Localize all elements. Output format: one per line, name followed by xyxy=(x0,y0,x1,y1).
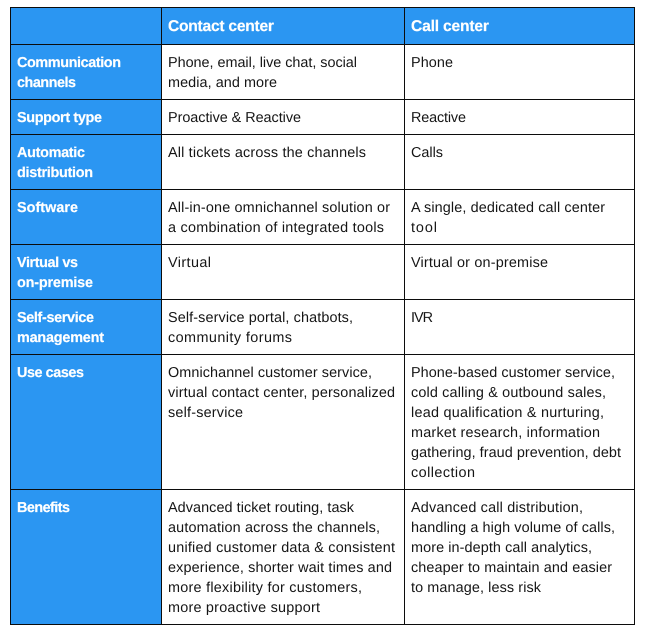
row: automatic distribution: distribution xyxy=(17,165,93,181)
row: software: tool xyxy=(411,220,437,236)
row: use cases: Phone-based customer service, xyxy=(411,365,615,381)
row: use cases: cold calling & outbound sales, xyxy=(411,385,606,401)
row: benefits: Advanced call distribution, xyxy=(411,500,583,516)
row: benefits: handling a high volume of calls, xyxy=(411,520,615,536)
row: automatic distribution: All tickets across the channels xyxy=(168,145,366,161)
row: use cases: Use cases xyxy=(17,365,84,381)
row: benefits: more proactive support xyxy=(168,600,320,616)
row: use cases: market research, information xyxy=(411,425,600,441)
row: benefits: to manage, less risk xyxy=(411,580,542,596)
row: benefits: Advanced ticket routing, task xyxy=(168,500,355,516)
row: use cases: self-service xyxy=(168,405,243,421)
row: support type: Reactive xyxy=(411,110,466,126)
row: use cases: lead qualification & nurturing, xyxy=(411,405,604,421)
row: communication channels: Phone, email, live chat, social xyxy=(168,55,357,71)
row: virtual vs on-premise: Virtual vs xyxy=(17,255,78,271)
row: use cases: Omnichannel customer service, xyxy=(168,365,372,381)
row: virtual vs on-premise: on-premise xyxy=(17,275,93,291)
row: software: a combination of integrated tools xyxy=(168,220,384,236)
row: support type xyxy=(17,110,466,126)
row: virtual vs on-premise: Virtual xyxy=(168,255,211,271)
row: automatic distribution xyxy=(17,145,443,181)
row: benefits: automation across the channels, xyxy=(168,520,380,536)
row: self-service management: Self-service xyxy=(17,310,94,326)
row: benefits: more flexibility for customers, xyxy=(168,580,362,596)
row: communication channels xyxy=(17,55,453,91)
row: self-service management: Self-service portal, chatbots, xyxy=(168,310,353,326)
row: self-service management xyxy=(17,310,433,346)
header row: Call center xyxy=(411,18,489,35)
row: communication channels: Communication xyxy=(17,55,121,71)
row: automatic distribution: Calls xyxy=(411,145,443,161)
row: self-service management: community forums xyxy=(168,330,292,346)
row: benefits: Benefits xyxy=(17,500,70,516)
row: self-service management: management xyxy=(17,330,104,346)
header row: Contact center xyxy=(168,18,274,35)
row: benefits xyxy=(17,500,615,616)
row: use cases xyxy=(17,365,621,481)
header row xyxy=(168,18,489,35)
row: support type: Proactive & Reactive xyxy=(168,110,301,126)
row: automatic distribution: Automatic xyxy=(17,145,85,161)
row: virtual vs on-premise xyxy=(17,255,548,291)
row: communication channels: Phone xyxy=(411,55,453,71)
row: software xyxy=(17,200,605,236)
row: use cases: virtual contact center, personalized xyxy=(168,385,395,401)
row: use cases: collection xyxy=(411,465,475,481)
row: virtual vs on-premise: Virtual or on-premise xyxy=(411,255,548,271)
row: software: A single, dedicated call center xyxy=(411,200,605,216)
row: support type: Support type xyxy=(17,110,102,126)
row: benefits: unified customer data & consistent xyxy=(168,540,395,556)
row: self-service management: IVR xyxy=(411,310,433,326)
row: communication channels: media, and more xyxy=(168,75,277,91)
row: benefits: experience, shorter wait times and xyxy=(168,560,392,576)
row: communication channels: channels xyxy=(17,75,76,91)
row: use cases: gathering, fraud prevention, debt xyxy=(411,445,621,461)
row: software: Software xyxy=(17,200,78,216)
row: benefits: more in-depth call analytics, xyxy=(411,540,592,556)
row: software: All-in-one omnichannel solution or xyxy=(168,200,390,216)
row: benefits: cheaper to maintain and easier xyxy=(411,560,612,576)
